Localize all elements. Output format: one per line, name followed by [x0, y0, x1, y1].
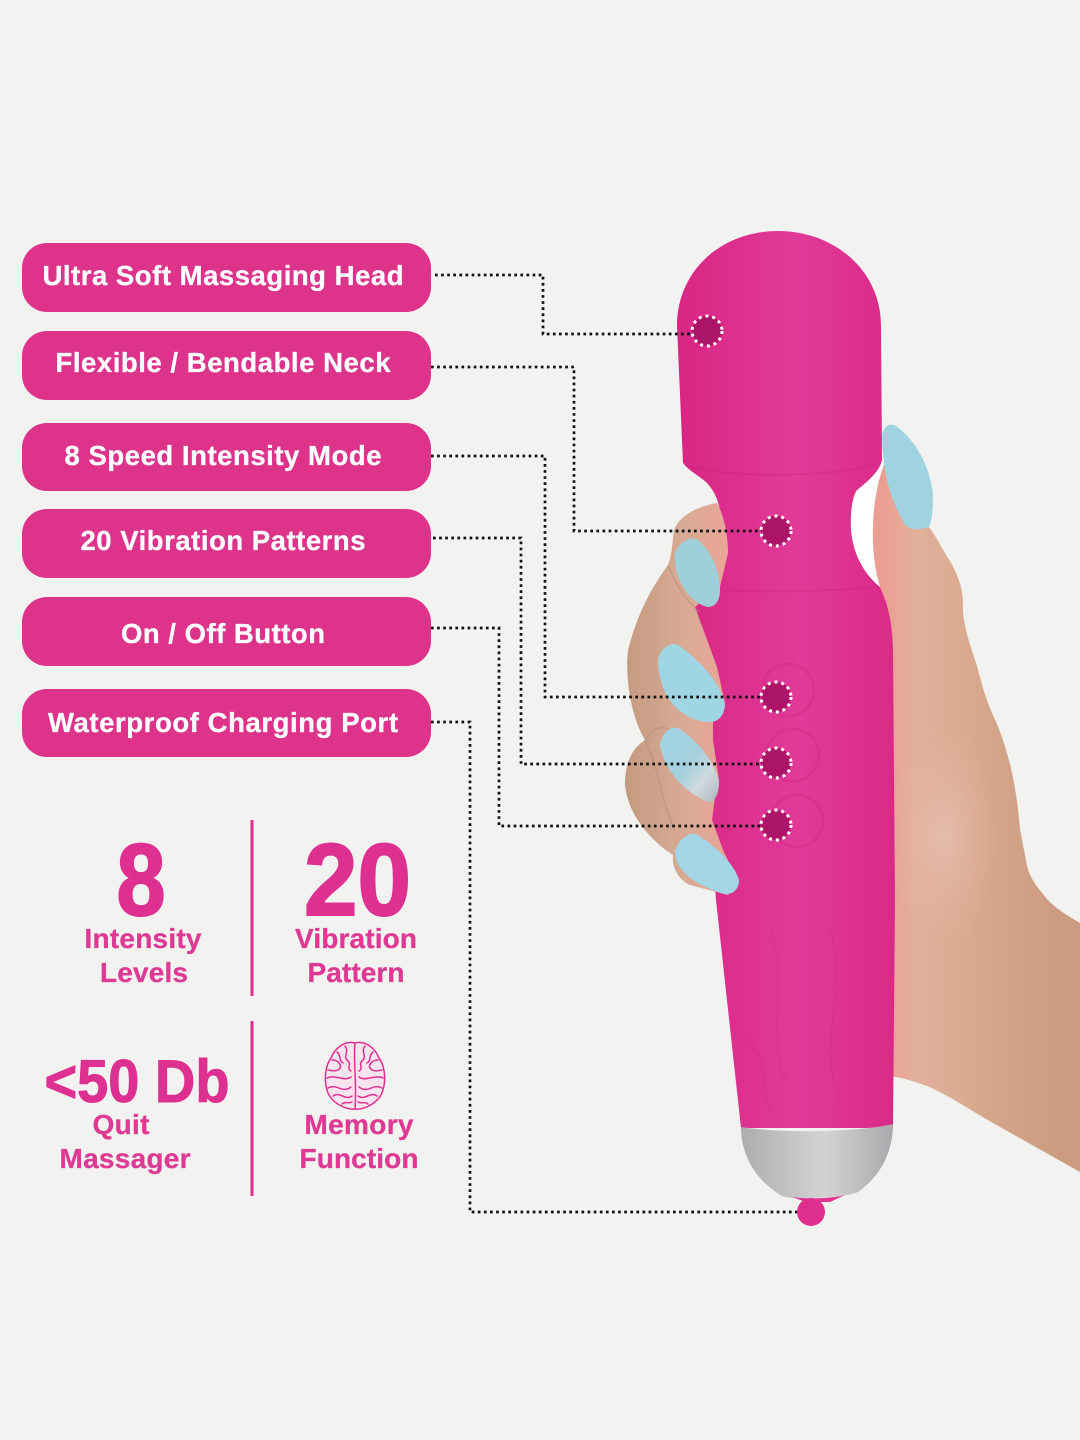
- stat: 20 vibration pattern: 20: [304, 823, 411, 937]
- hand: palm and thumb behind the wand: [873, 465, 1080, 1172]
- nail 1: [675, 539, 720, 607]
- stat: under 50 dB: <50 Db: [44, 1048, 230, 1115]
- buttons relief: [762, 664, 823, 847]
- label: Ultra Soft Massaging Head: [22, 243, 431, 312]
- stat: memory function: [300, 1042, 418, 1174]
- label: 20 Vibration Patterns: 20 Vibration Patterns: [80, 525, 366, 556]
- nail 4: [675, 834, 739, 894]
- stat: 8 intensity levels: 8: [116, 823, 166, 937]
- stat: 8 intensity levels: Levels: [100, 957, 188, 988]
- stat: memory function: Memory: [304, 1109, 414, 1140]
- stat: under 50 dB: Massager: [60, 1143, 191, 1174]
- stat: 20 vibration pattern: Vibration: [295, 923, 417, 954]
- stat dividers: [250, 820, 254, 1196]
- label: 20 Vibration Patterns: [22, 509, 431, 578]
- stat: under 50 dB: Quit: [92, 1109, 150, 1140]
- massager wand: [677, 231, 895, 1202]
- icon: brain: [325, 1042, 385, 1109]
- wand body: [677, 231, 895, 1128]
- label: Waterproof Charging Port: [22, 689, 431, 757]
- label: On / Off Button: [22, 597, 431, 666]
- thumb nail: [882, 425, 933, 529]
- grip ripples: [745, 930, 840, 1115]
- hand: fingers over the wand: [625, 425, 933, 895]
- nail 3: glitter: [660, 728, 719, 802]
- charging base: [741, 1124, 893, 1198]
- base pink rim: [792, 1195, 845, 1202]
- neck shading: [688, 464, 878, 591]
- stat: 20 vibration pattern: Pattern: [308, 957, 404, 988]
- stat: 8 intensity levels: [84, 823, 202, 988]
- label: Flexible / Bendable Neck: Flexible / Bendable Neck: [56, 347, 391, 378]
- label: Ultra Soft Massaging Head: Ultra Soft Massaging Head: [42, 260, 404, 291]
- label: On / Off Button: On / Off Button: [121, 618, 325, 649]
- stat: 8 intensity levels: Intensity: [84, 923, 202, 954]
- nail 2: [658, 644, 725, 722]
- marker dots: [692, 316, 825, 1226]
- connector lines: [431, 275, 798, 1212]
- white gap between wand neck and thumb: [850, 458, 890, 592]
- label: Flexible / Bendable Neck: [22, 331, 431, 400]
- stat: under 50 dB: [44, 1048, 230, 1174]
- stat: 20 vibration pattern: [295, 823, 417, 988]
- stat: memory function: Function: [300, 1143, 418, 1174]
- label: Waterproof Charging Port: Waterproof Charging Port: [48, 707, 398, 738]
- finger creases: [645, 565, 700, 830]
- label: 8 Speed Intensity Mode: 8 Speed Intensity Mode: [64, 440, 382, 471]
- label: 8 Speed Intensity Mode: [22, 423, 431, 491]
